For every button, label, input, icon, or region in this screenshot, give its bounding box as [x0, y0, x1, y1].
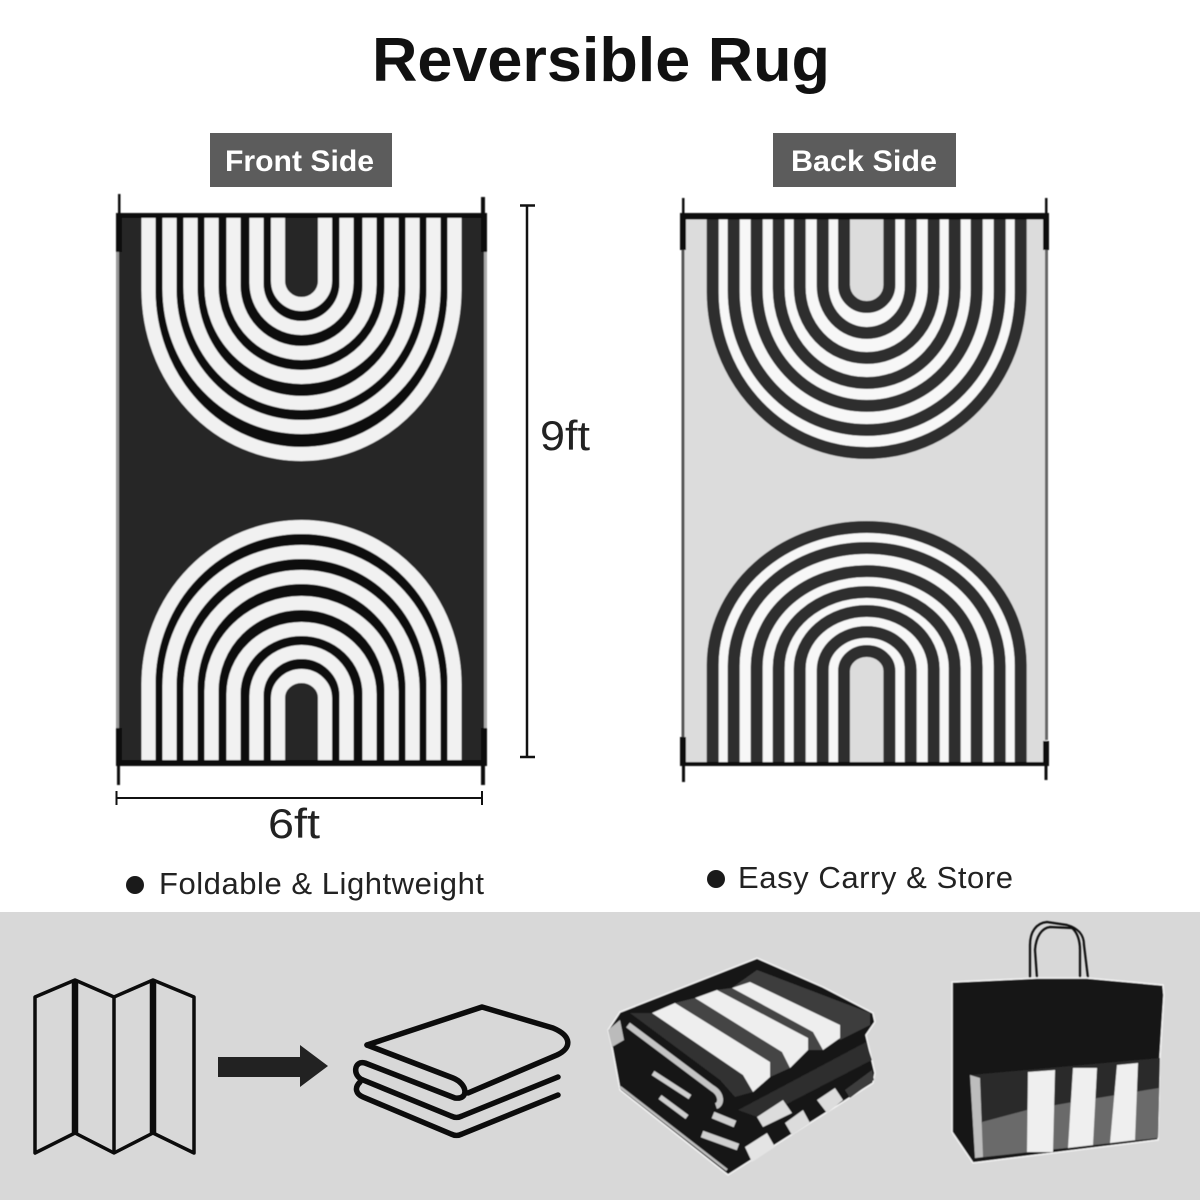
bottom arch pattern [148, 527, 454, 760]
stack silhouette [608, 958, 875, 1175]
dimension: 9ft height [520, 206, 590, 757]
label: front side [210, 133, 392, 187]
panel: front side rug [116, 194, 487, 785]
clear window [970, 1058, 1160, 1158]
bullet: foldable and lightweight: Foldable & Lightweight [159, 866, 484, 901]
side dotted layers [738, 1042, 872, 1118]
icon: unfolded rug [35, 980, 194, 1153]
label: front side: Front Side [225, 145, 374, 178]
panel: grey storage band [0, 912, 1200, 1200]
icon: folded rug [356, 1007, 568, 1136]
lower right stripes [757, 1100, 792, 1127]
dimension: 9ft height: 9ft [540, 412, 590, 459]
dimension: 6ft width [116, 791, 482, 847]
top arch pattern [713, 220, 1021, 453]
dotted top panel [733, 970, 870, 1040]
bag body [952, 978, 1164, 1163]
label: back side [773, 133, 956, 187]
panel: back side rug [680, 198, 1049, 782]
title: Reversible Rug [372, 26, 830, 95]
left side folds [608, 1020, 624, 1047]
top arch pattern [148, 218, 454, 454]
bullet: easy carry and store: Easy Carry & Store [738, 860, 1013, 895]
photo: carry bag [952, 922, 1164, 1163]
photo: folded rug stack [608, 958, 875, 1175]
top stripes [630, 1013, 753, 1097]
bag handles [1030, 922, 1088, 978]
label: back side: Back Side [791, 145, 937, 178]
arrow [218, 1045, 328, 1087]
bottom arch pattern [713, 527, 1021, 762]
dimension: 6ft width: 6ft [268, 800, 320, 847]
